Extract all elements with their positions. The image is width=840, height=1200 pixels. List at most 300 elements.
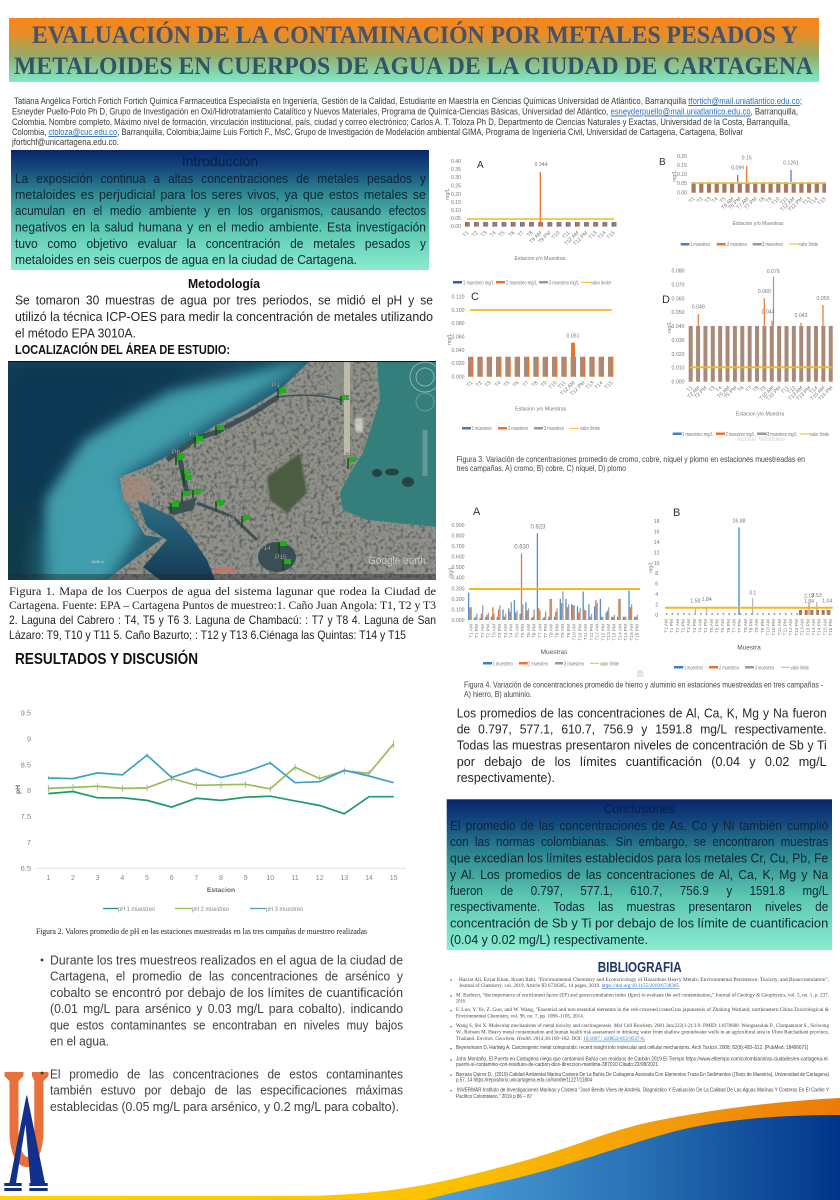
x labels: T7 AM — [537, 624, 543, 638]
x labels: T2 — [475, 380, 483, 389]
x labels: T1 PM — [669, 619, 675, 633]
x labels: T6 — [737, 385, 745, 394]
x labels: T7 PM — [743, 196, 758, 211]
x labels: T12 — [787, 385, 797, 396]
legend: pH 3 muestreo — [266, 906, 303, 913]
x labels: T14 AM — [811, 619, 817, 636]
y labels: 0.15 — [451, 200, 461, 206]
y labels: 0.040 — [672, 324, 685, 330]
reference text: p.57, 14 https://repositorio.unicartagena.edu.co/handle/11227/11804 — [456, 1078, 592, 1084]
legend: 2 muestreo — [719, 666, 739, 672]
bars — [689, 277, 833, 367]
conclusions text: (0.04 y 0.02 mg/L) respectivamente. — [450, 932, 648, 947]
y labels: 10 — [654, 561, 660, 567]
x axis labels: 9 — [244, 875, 248, 882]
value labels: 0.055 — [817, 296, 830, 302]
x labels: T7 PM — [543, 624, 549, 638]
x axis labels: 1 — [46, 875, 50, 882]
map flag labels: P13 — [223, 515, 235, 522]
x labels: T8 AM — [743, 619, 749, 633]
y labels — [654, 519, 660, 619]
legend: 3 muestreo — [564, 662, 584, 668]
x labels: T9 — [759, 385, 767, 394]
reference text — [456, 976, 830, 1100]
value label: 0.344 — [535, 162, 548, 168]
reference text: Pacífico Colombiano," 2019 p 86 – 87 — [456, 1094, 532, 1100]
conclusions text: que excedían los límites establecidos para los metales Cr, Cu, Pb, Fe — [450, 850, 828, 866]
x labels: T10 PM — [765, 385, 782, 402]
figure 4 caption — [464, 680, 823, 699]
heading: localización: LOCALIZACIÓN DEL ÁREA DE ESTUDIO: — [15, 342, 230, 357]
authors: jfortichf@unicartagena.edu.co. — [11, 137, 119, 148]
x labels: T12 AM — [594, 624, 600, 641]
text block: promedios — [457, 706, 827, 785]
legend: 3 muestreo — [762, 242, 783, 248]
x labels: T14 AM — [618, 624, 624, 641]
legend: 3 muestreo mg/L — [767, 432, 797, 438]
heading: conclusiones: Conclusiones — [604, 802, 675, 816]
x labels: T3 — [480, 230, 488, 239]
x labels: T4 — [489, 230, 497, 239]
x labels: T12 AM — [780, 196, 796, 213]
y labels — [451, 159, 461, 230]
x labels: T10 AM — [759, 385, 775, 402]
x labels: T1 — [688, 196, 696, 205]
intro text: metaloides en seis cuerpos de agua en la ciudad de Cartagena. — [15, 252, 357, 267]
error bars — [48, 740, 394, 792]
x labels: T2 PM — [693, 385, 708, 400]
x labels: T13 — [585, 380, 595, 391]
legend — [462, 426, 600, 432]
legend: valor límite — [580, 426, 600, 432]
value labels: 0.630 — [514, 544, 530, 550]
x labels: T8 PM — [554, 624, 560, 638]
figure 4 caption: A) hierro, B) aluminio. — [464, 689, 532, 699]
x labels: T8 — [752, 385, 760, 394]
series: pH 1 — [48, 792, 394, 814]
y labels: 14 — [654, 540, 660, 546]
map flag labels: P15 — [275, 554, 287, 561]
y title: mg/L — [445, 188, 451, 200]
legend: 2 muestreo mg/L — [726, 432, 755, 438]
x labels: T2 — [471, 230, 479, 239]
y title: mg/L — [667, 321, 673, 333]
y labels — [677, 154, 687, 196]
y labels: 6 — [655, 582, 658, 588]
value label: 0.051 — [567, 334, 580, 340]
x labels: T10 — [771, 196, 781, 207]
x labels: T1 AM — [468, 624, 474, 638]
panel letter B: B — [673, 507, 680, 519]
x labels: T13 PM — [612, 624, 618, 641]
y labels: 0.25 — [451, 184, 461, 190]
reference text: F. Luo, Y. Ye, Z. Guo, and W. Wang, "Essential and non essential elements in the red-crowned craneGrus japonensis of Zhalong Wetland, northeastern China.Toxicological & — [456, 1006, 830, 1013]
y labels: 0.10 — [677, 172, 687, 178]
y labels: 0.00 — [677, 190, 687, 196]
x labels: T12 PM — [572, 230, 589, 247]
x labels: T7 — [522, 380, 530, 389]
y axis labels: 9 — [27, 734, 31, 744]
x labels: T7 AM — [732, 619, 738, 633]
x labels: T15 — [606, 230, 616, 241]
value labels: 0.099 — [731, 166, 744, 172]
value labels: 1.84 — [804, 599, 814, 605]
x labels: T7 — [517, 230, 525, 239]
panel letter D: D — [662, 294, 670, 306]
x labels: T2 AM — [480, 624, 486, 638]
y labels: 0.35 — [451, 167, 461, 173]
x labels: T3 PM — [692, 619, 698, 633]
x labels: T10 PM — [577, 624, 583, 641]
reference text: Hazrat Ali, Ezzat Khan, Ikram Ilahi, "Environmental Chemistry and Ecotoxicology of Hazardous Heavy Metals: Environmental Persistence, Toxicity, and Bioaccumulation", — [459, 976, 830, 983]
panel: metodología — [15, 276, 433, 357]
methodology text: Se tomaron 30 muestras de agua por tres periodos, se midió el pH y se — [15, 292, 433, 308]
x axis labels: 3 — [96, 875, 100, 882]
intro text: negativos en la salud humana y en el medio ambiente. Esta investigación — [15, 220, 426, 234]
x labels: T11 — [557, 380, 567, 390]
methodology text — [15, 292, 433, 340]
bullet: especificaciones: El promedio de las concentraciones de estos contaminantes — [50, 1066, 403, 1082]
bars — [468, 310, 614, 367]
chart: fig 3B cobre — [659, 154, 827, 248]
heading: metodología: Metodología — [188, 276, 261, 291]
reference text: Environmental Chemistry, vol. 96, no. 7, pp. 1096–1105, 2014. — [456, 1014, 585, 1020]
x labels: T4 — [494, 380, 502, 389]
authors — [11, 96, 802, 148]
x labels: T12 PM — [600, 624, 606, 641]
x labels: T5 AM — [709, 619, 715, 633]
x axis labels: 7 — [194, 875, 198, 882]
x labels: T7 PM — [737, 619, 743, 633]
x labels: T3 — [704, 196, 712, 205]
x labels: T4 PM — [509, 624, 515, 638]
legend: 2 muestreo — [528, 662, 548, 668]
x labels: T4 — [715, 385, 723, 394]
x labels: T6 PM — [726, 619, 732, 633]
x labels: T11 PM — [783, 619, 789, 635]
panel letter A: A — [477, 160, 484, 171]
legend: 1 muestreo — [493, 662, 513, 668]
bars: muestreo 2 — [470, 554, 636, 620]
x axis labels: 10 — [266, 875, 274, 882]
y labels: 0.800 — [452, 534, 465, 540]
map flag labels: P6 — [172, 449, 180, 456]
x labels: T13 AM — [606, 624, 612, 641]
axis titles: Estacion — [207, 887, 235, 894]
y labels: 0.060 — [672, 296, 685, 302]
intro text: tuvo como objetivo evaluar la concentración de metales pesados y — [15, 236, 426, 251]
bullet: arsénico y cobalto: (0.01 mg/L para arsénico y 0.03 mg/L para cobalto). indicando — [50, 1001, 403, 1016]
watermark: Activar Windows — [737, 436, 786, 443]
x labels: T5 PM — [520, 624, 526, 638]
x title: Estacion y/o Muestras — [514, 256, 566, 262]
bars — [465, 172, 618, 226]
y labels: 0.000 — [672, 380, 685, 386]
y labels: 8 — [655, 571, 658, 577]
x labels: T5 — [503, 380, 511, 389]
y labels: 0.050 — [672, 310, 685, 316]
x labels: T15 — [604, 380, 614, 391]
x axis labels: 13 — [340, 875, 348, 882]
x labels: T6 AM — [721, 196, 735, 211]
chart: fig 3D plomo — [662, 268, 834, 443]
x title: Estacion y/o Muestra — [736, 412, 784, 418]
value labels: 0.060 — [758, 289, 771, 295]
x labels: T12 AM — [564, 230, 580, 247]
value labels: 0.044 — [762, 310, 775, 316]
bullet: especificaciones: establecidas (0.05 mg/L para arsénico, y 0.2 mg/L para cobalto). — [50, 1099, 399, 1114]
value labels: 16.88 — [733, 518, 746, 524]
y labels: 0.00 — [451, 224, 461, 230]
y labels: 0.05 — [451, 216, 461, 222]
y labels: 0.010 — [672, 366, 685, 372]
y labels: 0.000 — [452, 618, 465, 624]
value labels: 0.049 — [692, 304, 705, 310]
x labels: T2 AM — [687, 385, 701, 400]
authors: Tatiana Angélica Fortich Fortich Fortich Quimica Farmaceutica Especialista en Ingeniería, Gestión de la Calidad, Estudiante en Maestría en Ciencias Químicas Universidad de Atlántico, Barranquilla tfortich@mail.uniatlantico.edu.co; — [14, 96, 802, 107]
y title: mg/L — [447, 333, 453, 345]
x labels: T9 — [540, 380, 548, 389]
legend: 2 muestreo — [727, 242, 747, 248]
map flag labels: P7 — [187, 468, 195, 475]
title banner — [9, 18, 819, 82]
intro text: acumulan en el medio ambiente y en los organismos, causando efectos — [15, 203, 426, 218]
value labels — [731, 156, 799, 172]
figure 1 caption: 2. Laguna del Cabrero : T4, T5 y T6 3. Laguna de Chambacú: : T7 y T8 4. Laguna de San — [9, 613, 436, 627]
legend — [453, 280, 611, 286]
x labels — [468, 624, 641, 641]
x axis labels: 4 — [120, 875, 124, 882]
authors: Esneyder Puello-Polo Ph D, Grupo de Investigación en Oxi/Hidrotratamiento Catalítico y Nuevos Materiales, Programa de Química-Ciencias Básicas, Universidad del Atlántico, esneyderpuello@mail.uniatlantico.edu.co, Barranquilla, — [12, 106, 798, 118]
heading: bibliografía: BIBLIOGRAFIA — [598, 959, 682, 976]
legend: 1 muestreo — [684, 666, 703, 672]
x labels: T2 PM — [486, 624, 492, 638]
value labels: 0.823 — [530, 524, 546, 530]
reference text: Journal of Chemistry, vol. 2019, Article ID 6730305, 14 pages, 2019. https://doi.org/10.1155/2019/6730305 — [459, 982, 679, 989]
x labels: T2 — [696, 196, 704, 205]
x labels: T14 PM — [817, 619, 823, 636]
x labels: T13 — [802, 196, 812, 207]
x labels: T14 — [809, 196, 819, 207]
legend: pH 2 muestreo — [192, 906, 229, 913]
x labels: T11 — [780, 385, 790, 395]
x labels: T8 AM — [549, 624, 555, 638]
x labels: T3 AM — [686, 619, 692, 633]
legend: 2 muestreo mg/L — [506, 280, 537, 286]
map flag labels: P4 — [224, 428, 232, 435]
x title: Muestra — [737, 644, 761, 652]
y axis labels: 8.5 — [21, 760, 31, 770]
x labels: T11 AM — [583, 624, 589, 640]
conclusions text — [450, 818, 829, 947]
value labels: 2.18 — [804, 594, 814, 600]
series: pH 3 — [48, 755, 394, 783]
y axis labels: 7.5 — [21, 812, 31, 821]
x labels: T4 PM — [703, 619, 709, 633]
map flag labels: P11 — [154, 501, 165, 508]
legend: 1 muestreo — [472, 426, 492, 432]
x labels: T5 — [719, 196, 727, 205]
y labels: 0.300 — [452, 586, 465, 592]
figure 2 caption: Figura 2. Valores promedio de pH en las estaciones muestreadas en las tres campañas de muestreo realizadas — [36, 927, 367, 936]
y labels: 0.040 — [452, 348, 465, 354]
x axis labels: 14 — [365, 875, 373, 882]
x labels: T3 AM — [491, 624, 497, 638]
legend: valor límite — [791, 666, 809, 672]
x labels — [686, 385, 834, 402]
x labels: T1 — [462, 230, 470, 239]
google watermark: Google earth — [368, 555, 426, 567]
x labels: T9 AM — [560, 624, 566, 638]
y labels — [672, 268, 685, 386]
conclusions text: concentración de Sb y Ti por debajo de los límite de cuantificacion — [450, 916, 828, 930]
x axis labels: 2 — [71, 875, 75, 882]
legend: 3 muestreo — [755, 666, 774, 672]
bullet: arsénico y cobalto: Cartagena, el promedio de las concentraciones de arsénico y — [50, 968, 403, 984]
value labels: 1.04 — [822, 598, 832, 604]
y axis labels — [21, 708, 31, 873]
figure 3 caption — [457, 454, 805, 473]
bottom wave — [0, 1098, 840, 1200]
y labels: 0.100 — [452, 308, 465, 314]
x labels: T6 — [508, 230, 516, 239]
legend: 1 muestreo — [690, 242, 710, 248]
line chart: pH — [15, 708, 406, 913]
icon: faint cursor mark — [637, 670, 644, 677]
x labels: T10 AM — [766, 619, 772, 636]
y labels: 0.700 — [452, 544, 465, 550]
y labels: 0.020 — [672, 352, 685, 358]
text block: promedios: por debajo de los límites cuantificación (0.04 y 0.02 mg/L — [457, 754, 827, 769]
figure 1 caption: Cartagena. Fuente: EPA – Cartagena Puntos de muestreo:1. Caño Juan Angola: T1, T2 y T3 — [9, 598, 436, 612]
y labels: 0.120 — [452, 294, 465, 300]
bullet: arsénico y cobalto: cobalto se encontró por debajo de los límites de cuantificación — [50, 985, 403, 1000]
logo: UA — [4, 1072, 49, 1191]
legend — [674, 666, 809, 672]
value labels: 0.043 — [795, 313, 808, 319]
map flag labels: P1 — [272, 382, 280, 389]
map flag labels: P3 — [345, 452, 353, 459]
title banner: EVALUACIÓN DE LA CONTAMINACIÓN POR METALES PESADOS Y — [32, 21, 798, 49]
x labels: T5 AM — [717, 385, 731, 400]
x labels: T9 PM — [566, 624, 572, 638]
x labels: T5 AM — [514, 624, 520, 638]
chart: fig 3C níquel — [447, 291, 614, 432]
x axis labels: 5 — [145, 875, 149, 882]
value labels — [690, 518, 832, 605]
x labels: T10 PM — [771, 619, 777, 636]
figure 1 caption: Lázaro: T9, T10 y T11 5. Caño Bazurto; : T12 y T13 6.Ciénaga las Quintas: T14 y T15 — [9, 628, 406, 642]
intro text: metaloides es perjudicial para los seres vivos, ya que estos metales se — [15, 187, 426, 202]
figure 1 caption: Figura 1. Mapa de los Cuerpos de agua del sistema lagunar que rodea la Ciudad de — [9, 584, 436, 598]
legend: 2 muestreo — [508, 426, 528, 432]
value labels: 2.53 — [812, 593, 822, 599]
x labels: T11 AM — [777, 619, 783, 635]
bullet: arsénico y cobalto — [41, 952, 403, 1048]
x labels: T2 AM — [675, 619, 681, 633]
map flag labels: P14 — [259, 545, 271, 552]
value labels: 1.58 — [690, 598, 700, 604]
map flag labels: P2 — [345, 395, 353, 402]
x labels: T7 AM — [736, 196, 750, 211]
y labels: 0.070 — [672, 282, 685, 288]
x axis labels — [46, 875, 398, 882]
heading: resultados: RESULTADOS Y DISCUSIÓN — [15, 649, 198, 668]
bullet: arsénico y cobalto: que estos contaminantes se encontraban en niveles muy bajos — [50, 1018, 403, 1032]
methodology text: utilizó la técnica ICP-OES para medir la concentración de metales utilizando — [15, 309, 433, 324]
reference text: Thailand. Environ. Geochem. Health. 2014;36:169–182. DOI: 10.1007 / s10653-013-9537-8. — [456, 1036, 646, 1042]
map flag labels — [154, 382, 353, 561]
legend: valor límite — [600, 662, 619, 668]
y labels: 0.000 — [452, 374, 465, 380]
map flags — [171, 388, 356, 571]
x labels: T6 PM — [727, 196, 742, 211]
legend: 1 muestreo mg/L — [463, 280, 494, 286]
x labels: T13 AM — [800, 619, 806, 636]
y labels: 0.100 — [452, 607, 465, 613]
x labels: T3 PM — [497, 624, 503, 638]
panel: introducción — [11, 150, 429, 270]
y title: mg/L — [672, 170, 678, 182]
bars: muestreo 3 — [471, 592, 637, 620]
x axis labels: 11 — [291, 875, 299, 882]
reference text: 2016. — [456, 998, 466, 1004]
value labels — [514, 524, 546, 550]
x axis labels: 8 — [219, 875, 223, 882]
x labels: T15 PM — [817, 385, 834, 402]
legend — [483, 662, 619, 668]
y labels: 2 — [655, 602, 658, 608]
legend: 3 muestreo mg/L — [549, 280, 579, 286]
x labels: T14 — [594, 380, 604, 391]
y labels: 0.05 — [677, 181, 687, 187]
methodology text: el método EPA 3010A. — [15, 326, 136, 340]
legend: 1 muestreo mg/L — [682, 432, 713, 438]
x labels: T13 AM — [788, 385, 804, 402]
y labels: 0.080 — [452, 321, 465, 327]
y labels: 0.020 — [452, 361, 465, 367]
legend: 3 muestreo — [544, 426, 564, 432]
x labels: T8 — [758, 196, 766, 205]
x labels: T12 AM — [560, 380, 576, 397]
x title: Estacion y/o Muestras — [732, 221, 784, 227]
x labels: T13 PM — [805, 619, 811, 636]
legend — [681, 242, 818, 248]
chart: fig 4A hierro — [448, 506, 641, 668]
bars — [665, 527, 833, 615]
value labels: 0.076 — [767, 269, 780, 275]
panel letter C: C — [471, 291, 479, 303]
y labels: 0.600 — [452, 555, 465, 561]
legend — [103, 906, 303, 913]
value labels: 0.15 — [742, 156, 752, 162]
x axis labels: 15 — [390, 875, 398, 882]
panel letter A: A — [473, 506, 481, 518]
x labels: T5 PM — [714, 619, 720, 633]
x labels: T15 AM — [822, 619, 828, 636]
x labels: T9 AM — [754, 619, 760, 633]
legend — [673, 432, 829, 438]
y axis labels: 7 — [27, 838, 31, 847]
y labels: 0.900 — [452, 523, 465, 529]
x labels: T8 PM — [749, 619, 755, 633]
figure 1 caption — [9, 584, 436, 642]
value labels — [692, 269, 830, 319]
x labels: T6 AM — [526, 624, 532, 638]
value labels: 3.1 — [749, 590, 756, 596]
x labels: T8 — [531, 380, 539, 389]
x title: Muestras — [541, 649, 568, 656]
